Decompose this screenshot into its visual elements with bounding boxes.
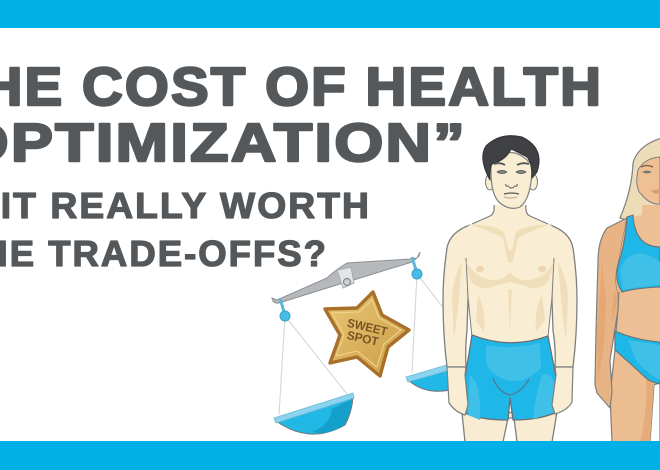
man figure [443,136,577,442]
right pan [406,364,450,391]
star label: SWEET [346,316,390,339]
man neck lines [472,205,548,224]
woman leg shading [640,378,654,442]
woman arm shading [597,262,618,380]
shorts crease [493,378,529,395]
man torso side lines [466,258,554,337]
shorts highlights [468,343,556,420]
star label: SPOT [346,328,381,349]
man left hand [447,367,468,415]
beam pivot [337,267,354,288]
left pan [274,393,354,434]
bikini highlight [628,340,660,380]
man right hand [552,367,573,414]
woman hair [620,138,660,225]
man right arm [540,225,577,367]
woman bikini bottom [615,331,660,384]
man muscle shading [452,225,568,340]
facial features [494,163,529,198]
title [0,57,603,274]
woman torso edge [616,292,619,332]
scale beam [272,252,420,303]
woman figure [595,138,660,442]
woman leg [610,335,660,442]
star shape [325,292,409,376]
man torso [466,205,554,348]
woman neck and torso [616,205,660,345]
woman sports bra [617,215,660,292]
man left arm [443,225,480,367]
right hook and ball [412,257,422,279]
ears [486,174,494,190]
woman eye and lips [641,166,660,194]
left hook and ball [280,298,290,321]
bottom banner [0,441,660,470]
woman face [637,157,660,204]
bra highlight [620,253,660,290]
star inner highlight [332,300,401,367]
woman arm [595,218,627,408]
man head [483,136,539,208]
face [491,152,532,208]
man legs [462,412,557,442]
scale strings [279,274,445,415]
hair [483,136,539,180]
sweet spot star badge [325,292,409,376]
top banner [0,0,660,28]
man shorts [465,335,557,420]
star label [343,316,390,350]
balance scale [272,252,450,434]
